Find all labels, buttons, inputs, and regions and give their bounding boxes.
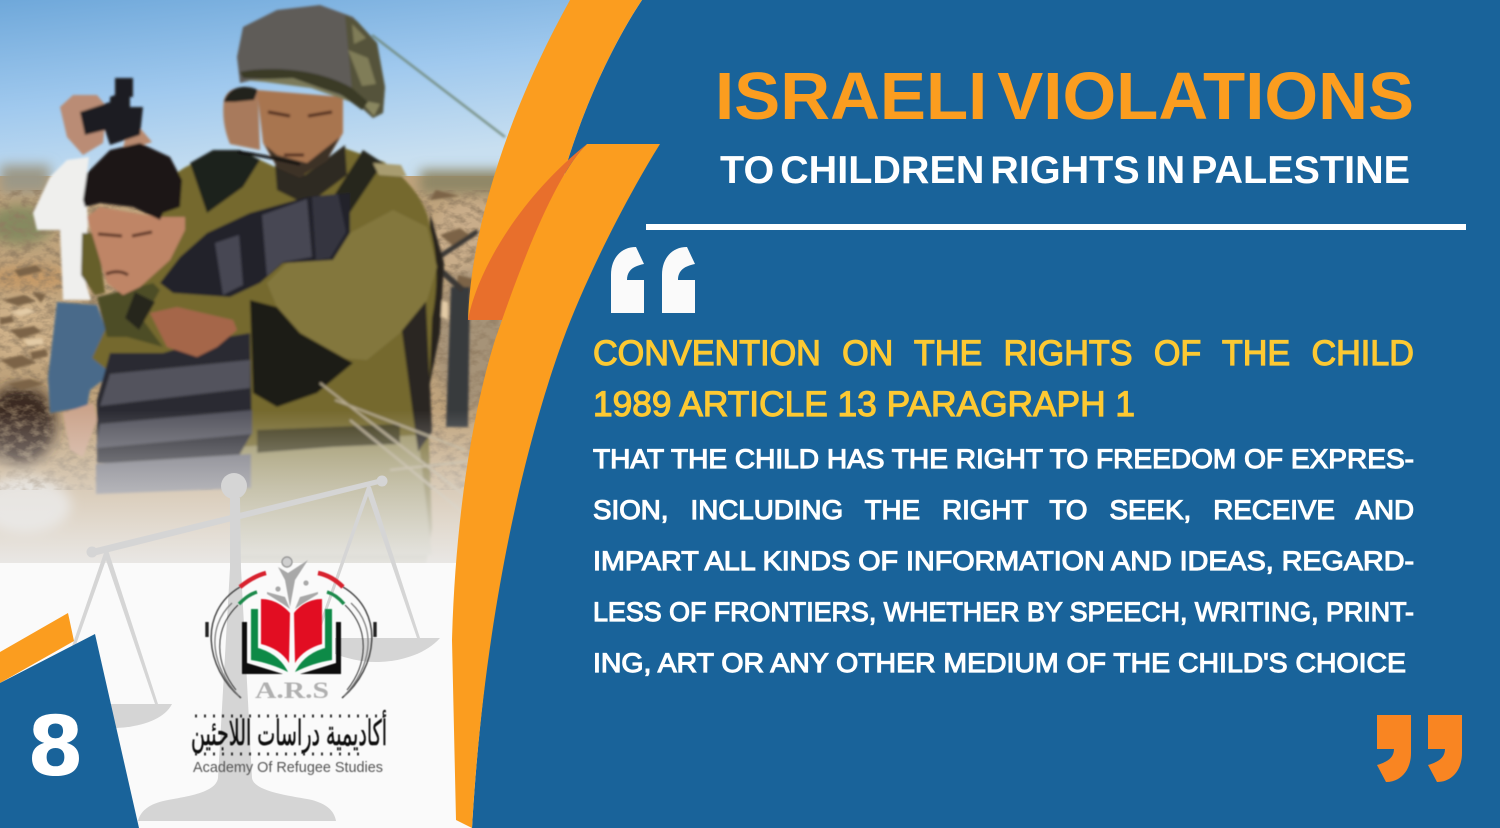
helmet	[235, 3, 356, 97]
sweater arm	[160, 193, 350, 297]
divider	[646, 224, 1466, 230]
orange lower swoosh	[452, 144, 660, 828]
logo flag strokes	[240, 573, 266, 587]
article body text	[593, 444, 1414, 678]
logo green pages	[251, 609, 332, 672]
belt	[257, 424, 400, 453]
logo English name: Academy Of Refugee Studies	[193, 759, 383, 776]
cameraman head	[60, 95, 107, 155]
soldier body	[91, 147, 438, 533]
icon: closing quote marks	[1377, 715, 1462, 782]
light lower-left panel	[0, 563, 480, 828]
logo initials: A.R.S	[255, 678, 329, 703]
child hair	[83, 143, 182, 220]
soldier sleeve behind child face	[81, 233, 105, 295]
article body text: SION, INCLUDING THE RIGHT TO SEEK, RECEIVE AND	[593, 495, 1414, 525]
logo calligraphy marks	[195, 716, 385, 754]
page number tab accent	[0, 613, 74, 683]
photo: soldier restraining a child	[0, 0, 600, 588]
dark orange overlap	[468, 144, 587, 320]
child torso stripes	[97, 333, 252, 467]
second man face	[223, 88, 260, 150]
rocks	[0, 190, 488, 390]
article body text: LESS OF FRONTIERS, WHETHER BY SPEECH, WRITING, PRINT-	[593, 597, 1414, 627]
logo arcs	[207, 587, 375, 698]
panel: main blue background	[472, 0, 1500, 828]
wire	[372, 35, 505, 137]
camera	[80, 78, 143, 145]
soldier lower uniform	[236, 435, 432, 555]
page number tab	[0, 634, 139, 828]
gun	[446, 287, 470, 427]
cameraman shirt	[33, 157, 91, 300]
title: ISRAELI VIOLATIONS	[715, 59, 1414, 134]
chin strap	[238, 152, 300, 164]
dark torso	[250, 300, 353, 407]
vest and strap	[190, 150, 260, 213]
page number: 8	[27, 700, 84, 795]
article heading	[593, 334, 1414, 424]
soldier neck	[275, 145, 347, 205]
logo figures	[267, 557, 318, 609]
child hand	[63, 403, 97, 457]
subtitle: TO CHILDREN RIGHTS IN PALESTINE	[720, 149, 1410, 192]
logo black cover	[242, 622, 341, 674]
photo fade to white	[0, 410, 600, 563]
cameraman jeans	[48, 302, 107, 413]
soldier arm	[267, 210, 437, 360]
soldier hand	[150, 307, 237, 357]
logo red pages	[261, 599, 322, 663]
article heading: 1989 ARTICLE 13 PARAGRAPH 1	[593, 385, 1135, 424]
icon: opening quote marks	[611, 247, 695, 313]
article body text: ING, ART OR ANY OTHER MEDIUM OF THE CHILD'S CHOICE	[593, 648, 1406, 678]
soldier face	[257, 90, 343, 177]
child face	[87, 207, 185, 295]
article body text: THAT THE CHILD HAS THE RIGHT TO FREEDOM OF EXPRES-	[593, 444, 1414, 474]
branches	[318, 380, 465, 488]
orange upper swoosh	[468, 0, 642, 320]
article heading: CONVENTION ON THE RIGHTS OF THE CHILD	[593, 334, 1414, 373]
logo Arabic name: أكاديمية دراسات اللاجئين	[191, 710, 387, 754]
icon: scales of justice	[57, 473, 440, 821]
article body text: IMPART ALL KINDS OF INFORMATION AND IDEAS, REGARD-	[593, 546, 1414, 576]
logo: Academy of Refugee Studies	[191, 557, 387, 776]
